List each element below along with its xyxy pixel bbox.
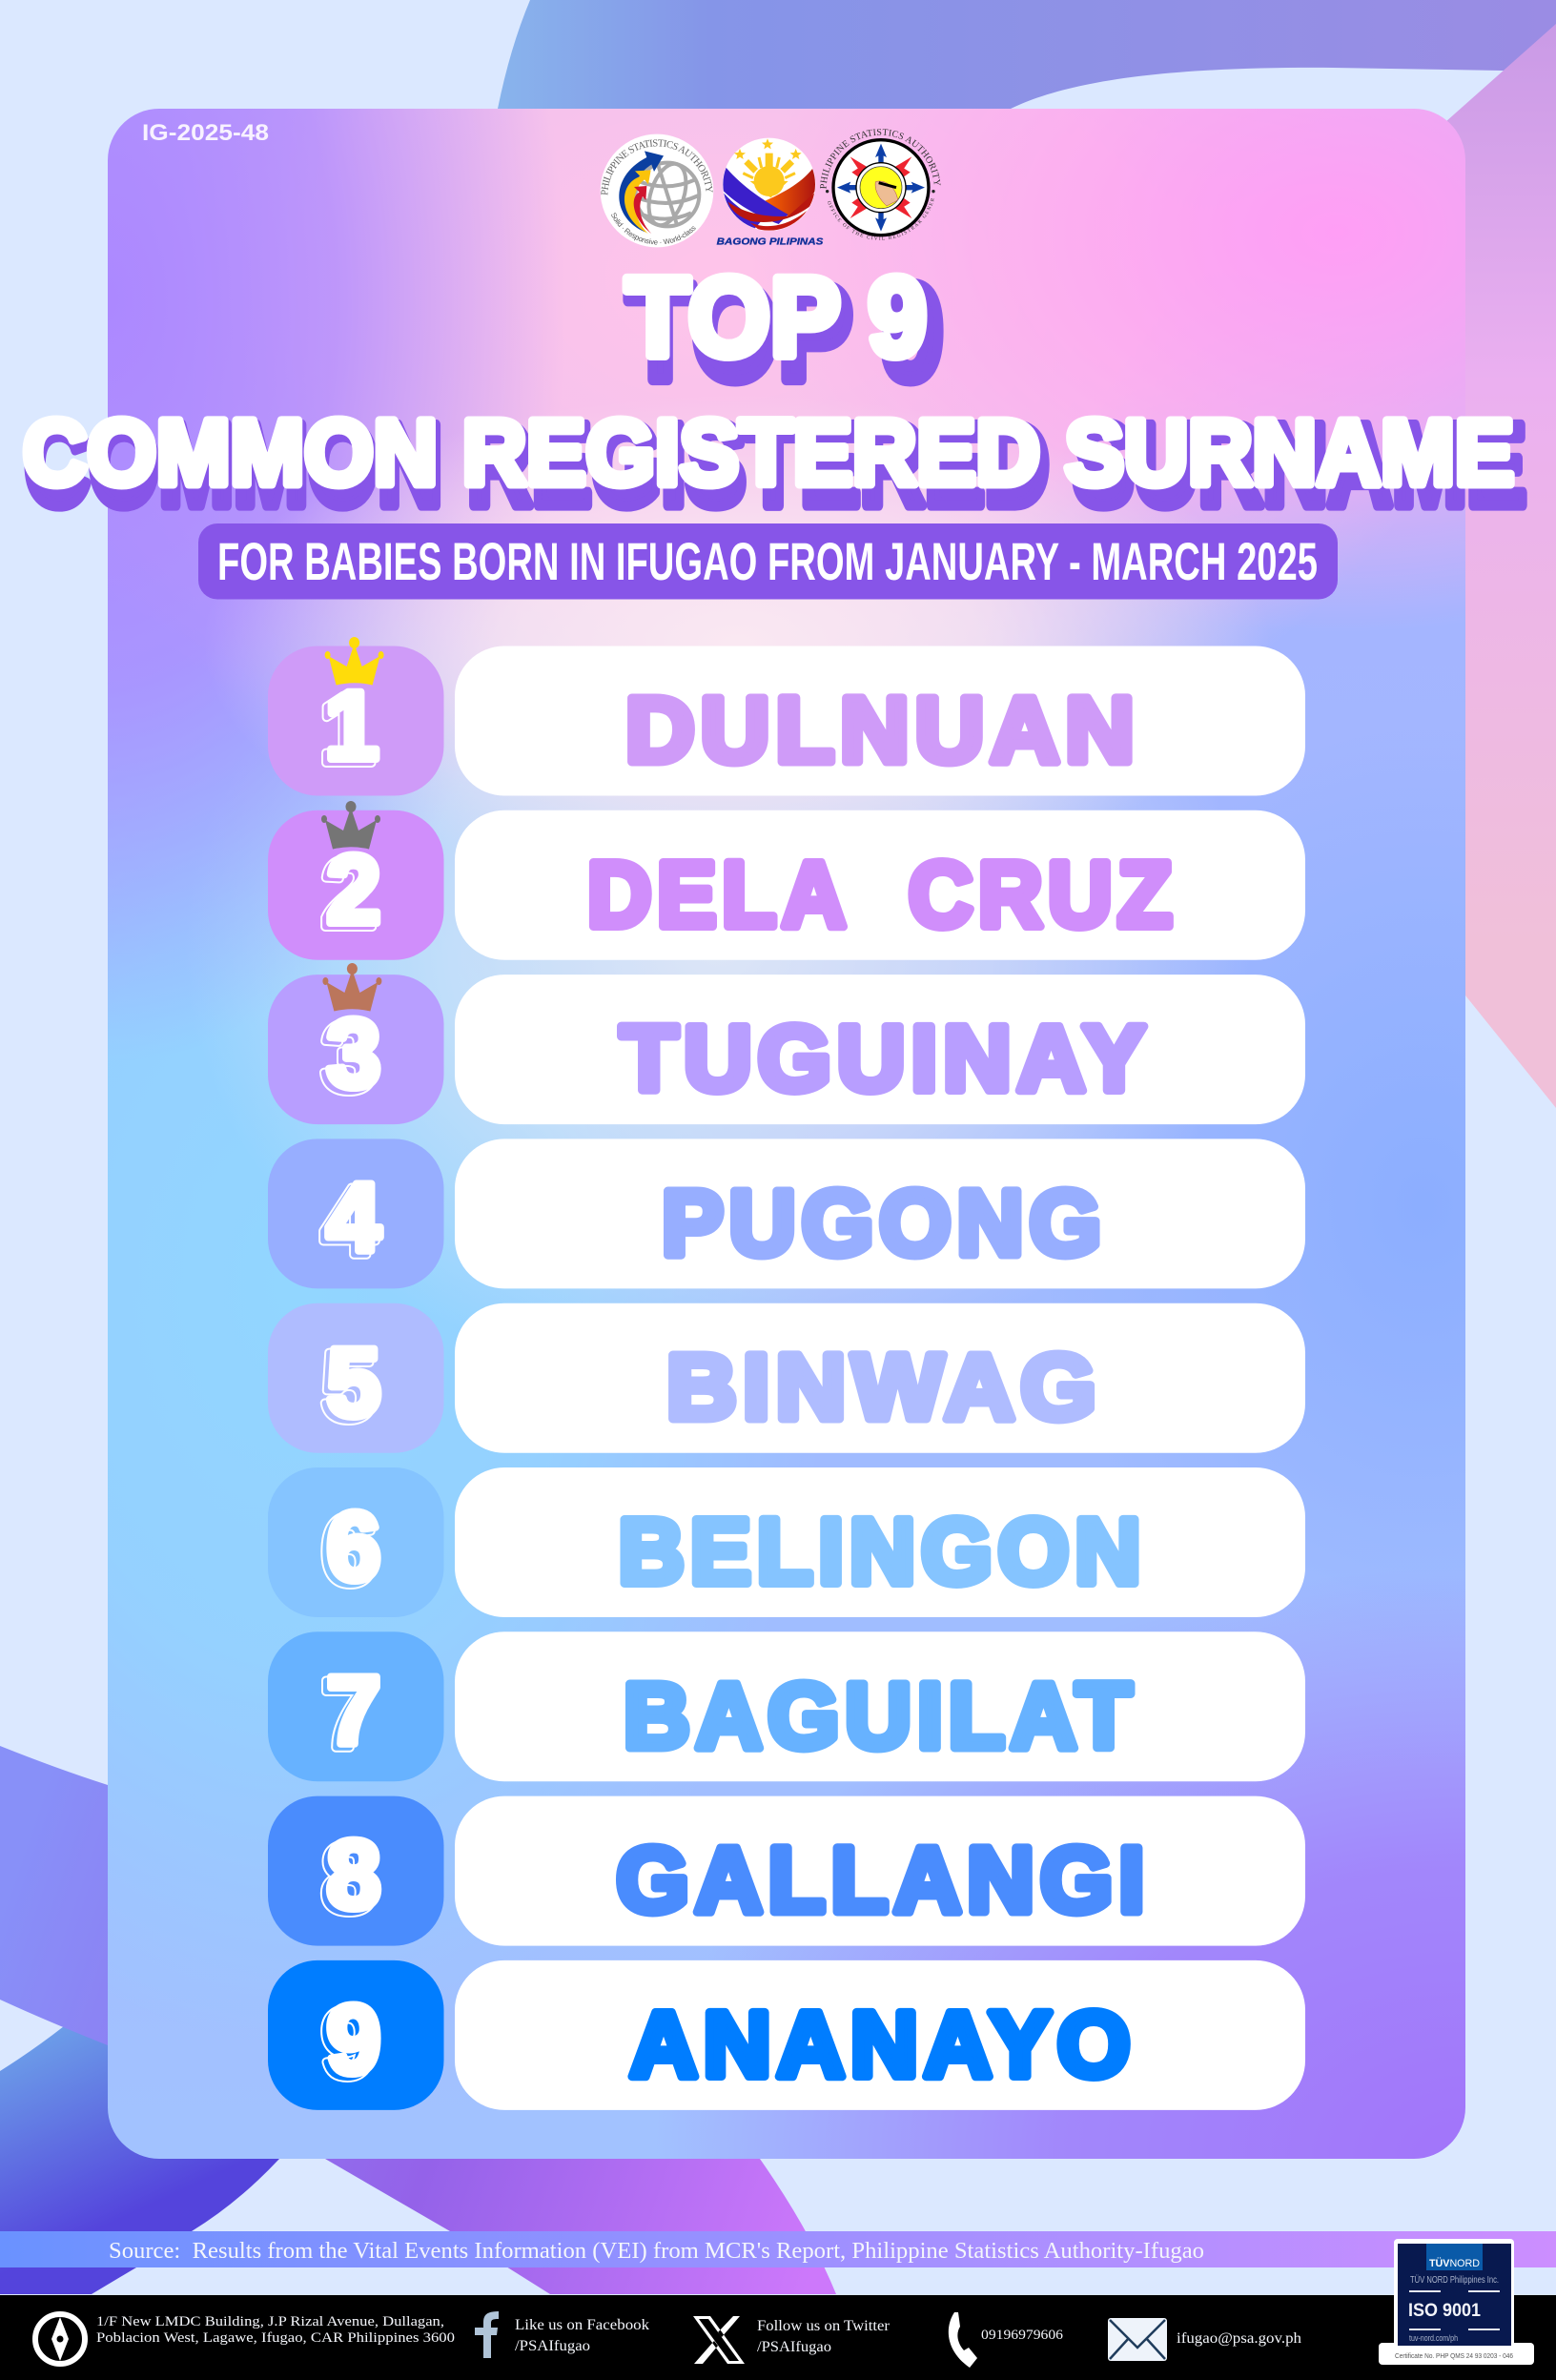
name 2: DELA CRUZ: [587, 842, 1177, 946]
address: Poblacion West, Lagawe, Ifugao, CAR Philippines 3600: [96, 2330, 455, 2346]
logo: Philippine Statistics Authority: Solid · Responsive · World-class: [611, 213, 696, 245]
icon: mail: [1108, 2318, 1167, 2361]
chip 9: [268, 1960, 444, 2110]
ISO 9001 badge: [1379, 2239, 1534, 2365]
shape: right pink wedge: [1430, 24, 1556, 1108]
rank row 6: [268, 1467, 1305, 1617]
email: ifugao@psa.gov.ph: [1177, 2330, 1301, 2347]
logo: Bagong Pilipinas: BAGONG PILIPINAS: [717, 236, 824, 247]
twitter text: Follow us on Twitter: [757, 2318, 891, 2334]
number 3: 3: [322, 1003, 376, 1112]
name 5: BINWAG: [666, 1335, 1102, 1439]
rank row 8: [268, 1796, 1305, 1946]
ISO 9001 badge: Certificate No. PHP QMS 24 93 0203 - 046: [1395, 2353, 1513, 2360]
logo: Philippine Statistics Authority: PHILIPPINE STATISTICS AUTHORITY: [601, 139, 713, 195]
name 4: PUGONG: [662, 1171, 1107, 1275]
number 8: 8: [327, 1820, 380, 1929]
ISO 9001 badge: TÜV NORD Philippines Inc.: [1410, 2274, 1499, 2286]
source band: Source: Results from the Vital Events Information (VEI) from MCR's Report, Philippine Statistics Authority-Ifugao: [109, 2239, 1204, 2264]
title: TOP 9: TOP 9: [626, 256, 943, 409]
number 5: 5: [322, 1332, 376, 1441]
number 7: 7: [322, 1660, 376, 1769]
icon: X: [693, 2316, 745, 2364]
facebook text: /PSAIfugao: [515, 2338, 590, 2354]
logo: Office of the Civil Registrar General: OFFICE OF THE CIVIL REGISTRAR GENERAL: [828, 198, 934, 240]
phone number: 09196979606: [981, 2328, 1064, 2343]
number 7: 7: [322, 1660, 376, 1769]
number 8: 8: [322, 1824, 376, 1933]
shape: top band: [498, 0, 1556, 109]
ISO 9001 badge: ISO 9001: [1408, 2301, 1481, 2321]
number 5: 5: [327, 1328, 380, 1437]
icon: phone: [949, 2312, 977, 2368]
document code: IG-2025-48: [142, 120, 269, 146]
title: Common Registered Surname: COMMON REGISTERED SURNAME: [25, 400, 1526, 531]
crown silver: [321, 801, 380, 849]
icon: compass: [35, 2314, 85, 2364]
name 3: TUGUINAY: [620, 1007, 1152, 1111]
number 9: 9: [322, 1989, 376, 2098]
rank row 7: [268, 1631, 1305, 1781]
name bar 8: [455, 1796, 1305, 1946]
number 4: 4: [327, 1163, 381, 1272]
number 9: 9: [322, 1989, 376, 2098]
number 6: 6: [327, 1492, 380, 1601]
facebook text: Like us on Facebook: [515, 2317, 649, 2333]
chip 4: [268, 1139, 444, 1288]
name bar 6: [455, 1467, 1305, 1617]
rank row 9: [268, 1960, 1305, 2110]
number 7: 7: [327, 1656, 380, 1765]
name bar 7: [455, 1631, 1305, 1781]
number 2: 2: [322, 839, 376, 948]
name bar 9: [455, 1960, 1305, 2110]
logo: Philippine Statistics Authority: [601, 133, 713, 248]
footer bar: [0, 2295, 1556, 2380]
chip 1: [268, 646, 444, 795]
twitter text: [757, 2318, 891, 2355]
number 1: 1: [320, 675, 374, 784]
logo: Office of the Civil Registrar General: PHILIPPINE STATISTICS AUTHORITY: [820, 129, 940, 189]
chip 7: [268, 1631, 444, 1781]
rank row 5: [268, 1303, 1305, 1453]
number 2: 2: [327, 835, 380, 944]
number 1: 1: [325, 671, 379, 780]
title: TOP 9: TOP 9: [625, 255, 927, 380]
name bar 1: [455, 646, 1305, 795]
main gradient panel: [108, 109, 1465, 2159]
title: Common Registered Surname: COMMON REGISTERED SURNAME: [23, 400, 1514, 504]
address: 1/F New LMDC Building, J.P Rizal Avenue, Dullagan,: [96, 2314, 444, 2329]
ISO 9001 badge: tuv-nord.com/ph: [1409, 2333, 1458, 2343]
name bar 2: [455, 810, 1305, 960]
name bar 3: [455, 975, 1305, 1124]
crown bronze: [322, 963, 381, 1011]
number 9: 9: [327, 1985, 380, 2094]
chip 2: [268, 810, 444, 960]
chip 3: [268, 975, 444, 1124]
logos row: [601, 129, 940, 248]
name 7: BAGUILAT: [624, 1664, 1137, 1768]
twitter text: /PSAIfugao: [757, 2339, 831, 2355]
logo: Bagong Pilipinas: [717, 138, 824, 247]
number 1: 1: [320, 675, 374, 784]
name 8: GALLANGI: [616, 1828, 1150, 1932]
number 8: 8: [322, 1824, 376, 1933]
number 3: 3: [322, 1003, 376, 1112]
source band: [0, 2231, 1556, 2267]
number 4: 4: [322, 1167, 377, 1276]
name bar 4: [455, 1139, 1305, 1288]
name 1: DULNUAN: [625, 678, 1140, 782]
crown gold: [325, 637, 384, 685]
rank row 3: [268, 963, 1305, 1124]
number 2: 2: [322, 839, 376, 948]
ISO 9001 badge: TÜVNORD: [1429, 2257, 1480, 2269]
shape: purple swoosh: [0, 1746, 836, 2294]
rank row 4: [268, 1139, 1305, 1288]
name 9: ANANAYO: [629, 1992, 1136, 2096]
facebook text: [515, 2317, 649, 2354]
number 5: 5: [322, 1332, 376, 1441]
chip 8: [268, 1796, 444, 1946]
name 6: BELINGON: [618, 1499, 1146, 1604]
number 3: 3: [327, 999, 380, 1108]
rank row 2: [268, 801, 1305, 960]
number 6: 6: [322, 1496, 376, 1605]
icon: facebook: [475, 2311, 499, 2358]
rank row 1: [268, 637, 1305, 795]
logo: Office of the Civil Registrar General: [820, 129, 940, 240]
address: [96, 2314, 455, 2346]
shape: bottom-left blue: [0, 2026, 381, 2294]
chip 6: [268, 1467, 444, 1617]
subtitle pill: [198, 523, 1338, 599]
number 6: 6: [322, 1496, 376, 1605]
number 4: 4: [322, 1167, 377, 1276]
chip 5: [268, 1303, 444, 1453]
name bar 5: [455, 1303, 1305, 1453]
